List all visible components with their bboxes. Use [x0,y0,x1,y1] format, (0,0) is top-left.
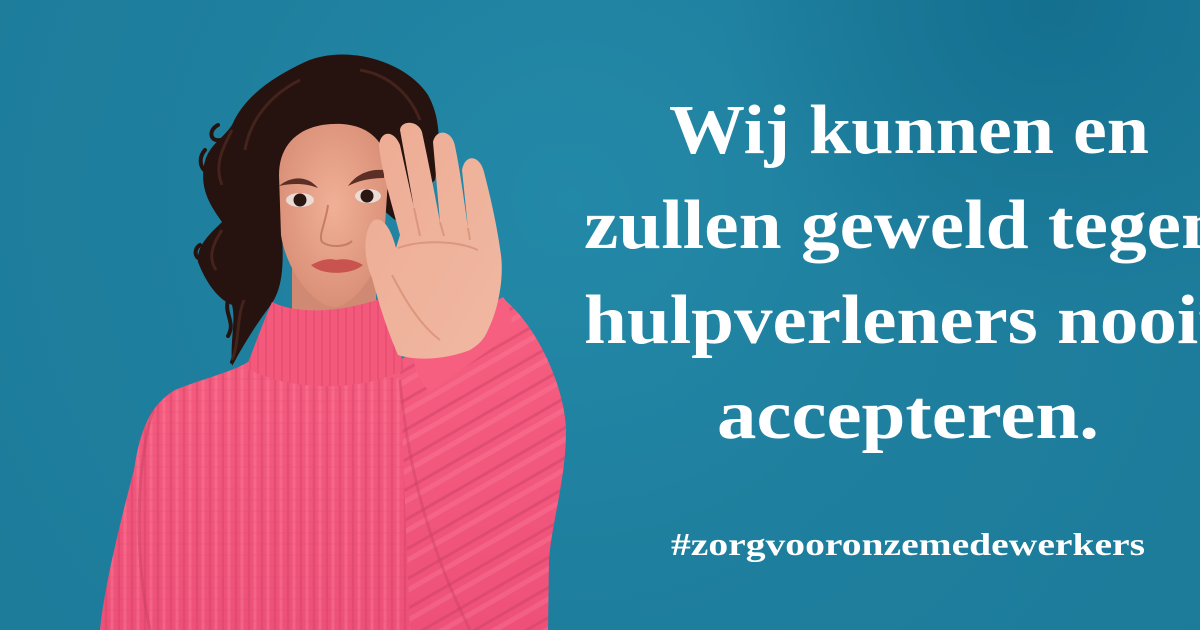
headline line 3: hulpverleners nooit [584,282,1200,359]
face features [279,170,384,273]
photo: woman in pink sweater holding up a stop hand [100,55,566,630]
sweater body [100,294,566,630]
raised hand [365,123,502,359]
headline line 2: zullen geweld tegen [584,187,1200,264]
hair [196,55,439,366]
cuff [414,297,512,392]
collar [246,294,404,386]
headline [584,92,1200,454]
headline line 1: Wij kunnen en [669,92,1149,169]
hashtag: #zorgvooronzemedewerkers [671,526,1145,562]
neck [292,255,376,322]
headline line 4: accepteren. [717,377,1099,454]
face [279,124,388,307]
